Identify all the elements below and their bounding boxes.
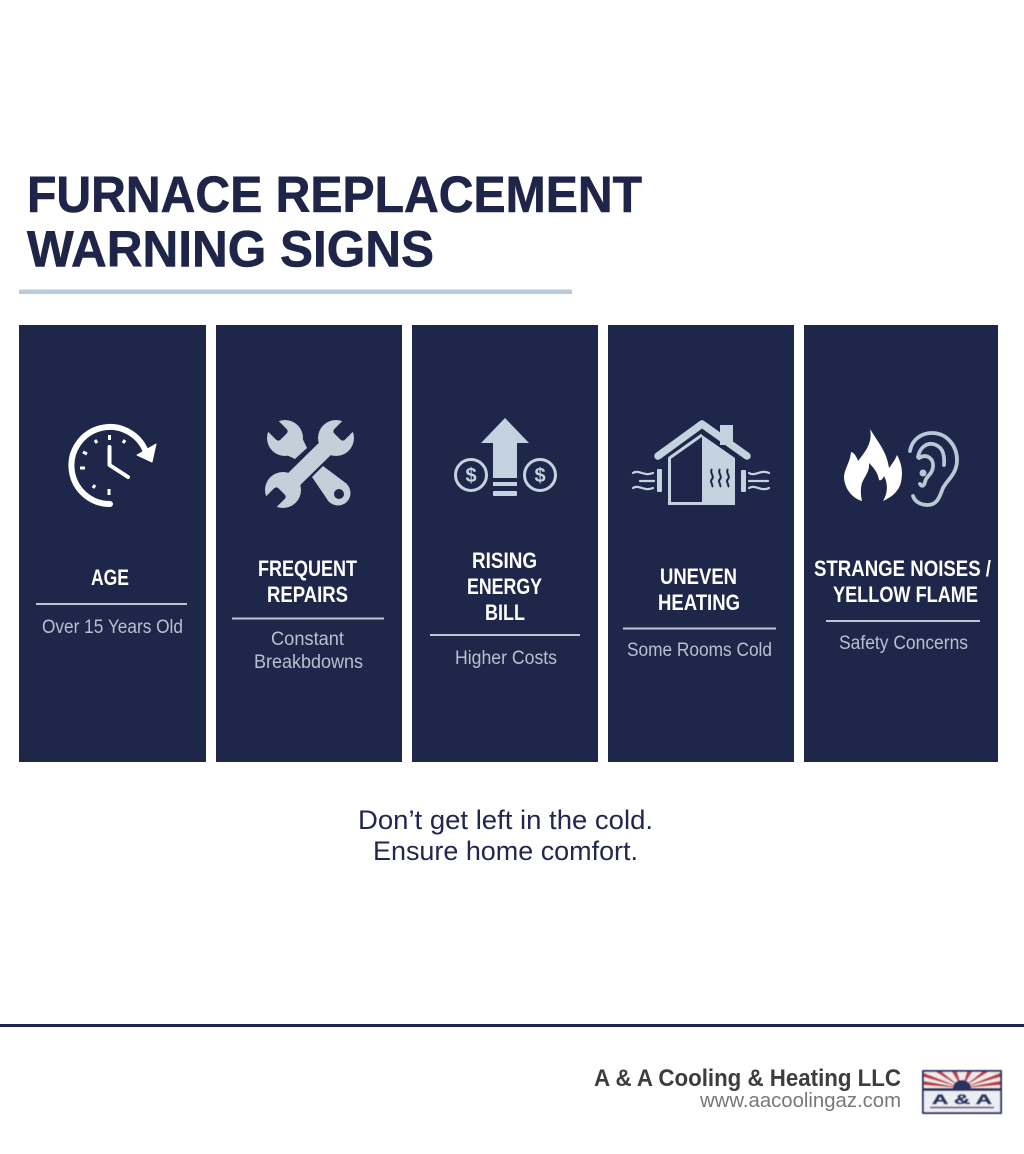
heading: rising energy bill: BILL	[485, 600, 525, 625]
panel: rising energy bill	[412, 325, 598, 762]
icon: ear	[910, 433, 957, 505]
icon: arrow and coins: $	[534, 465, 546, 487]
heading: age: AGE	[91, 565, 129, 590]
icon: arrow and coins: $	[465, 465, 477, 487]
icon: arrow and coins	[456, 418, 556, 496]
logo	[922, 1070, 1002, 1114]
heading: strange noises / yellow flame	[814, 556, 991, 607]
description: frequent repairs: Constant	[271, 629, 345, 650]
heading: uneven heating: HEATING	[658, 590, 740, 615]
heading: strange noises / yellow flame: STRANGE NOISES /	[814, 556, 991, 581]
closing message: Ensure home comfort.	[373, 836, 638, 866]
panel: uneven heating	[608, 325, 794, 762]
title: WARNING SIGNS	[27, 220, 434, 278]
heading: uneven heating	[658, 564, 740, 615]
logo: A & A	[932, 1091, 992, 1107]
heading: frequent repairs: FREQUENT	[258, 556, 357, 581]
description: uneven heating: Some Rooms Cold	[627, 640, 772, 661]
panel: frequent repairs	[216, 325, 402, 762]
description: frequent repairs: Breakbdowns	[254, 652, 363, 673]
icon: crossed wrenches	[256, 411, 363, 517]
heading: frequent repairs	[258, 556, 357, 607]
heading: rising energy bill: ENERGY	[467, 574, 542, 599]
panel: strange noises / yellow flame	[804, 325, 998, 762]
closing message	[358, 805, 653, 866]
icon: house with drafts	[633, 424, 769, 505]
footer company name: A & A Cooling & Heating LLC	[594, 1065, 901, 1092]
heading: uneven heating: UNEVEN	[660, 564, 737, 589]
title: FURNACE REPLACEMENT	[27, 166, 642, 223]
heading: rising energy bill	[467, 548, 542, 625]
footer website: www.aacoolingaz.com	[699, 1090, 901, 1112]
title	[27, 166, 642, 278]
icon: clock with arrow	[71, 427, 156, 504]
heading: strange noises / yellow flame: YELLOW FLAME	[833, 582, 978, 607]
panel: age	[19, 325, 206, 762]
icon: flame	[844, 429, 902, 501]
description: age: Over 15 Years Old	[42, 617, 183, 638]
description: frequent repairs	[254, 629, 363, 673]
description: strange noises / yellow flame: Safety Concerns	[839, 633, 968, 654]
closing message: Don’t get left in the cold.	[358, 805, 653, 835]
heading: rising energy bill: RISING	[472, 548, 537, 573]
description: rising energy bill: Higher Costs	[455, 648, 557, 669]
heading: frequent repairs: REPAIRS	[267, 582, 348, 607]
